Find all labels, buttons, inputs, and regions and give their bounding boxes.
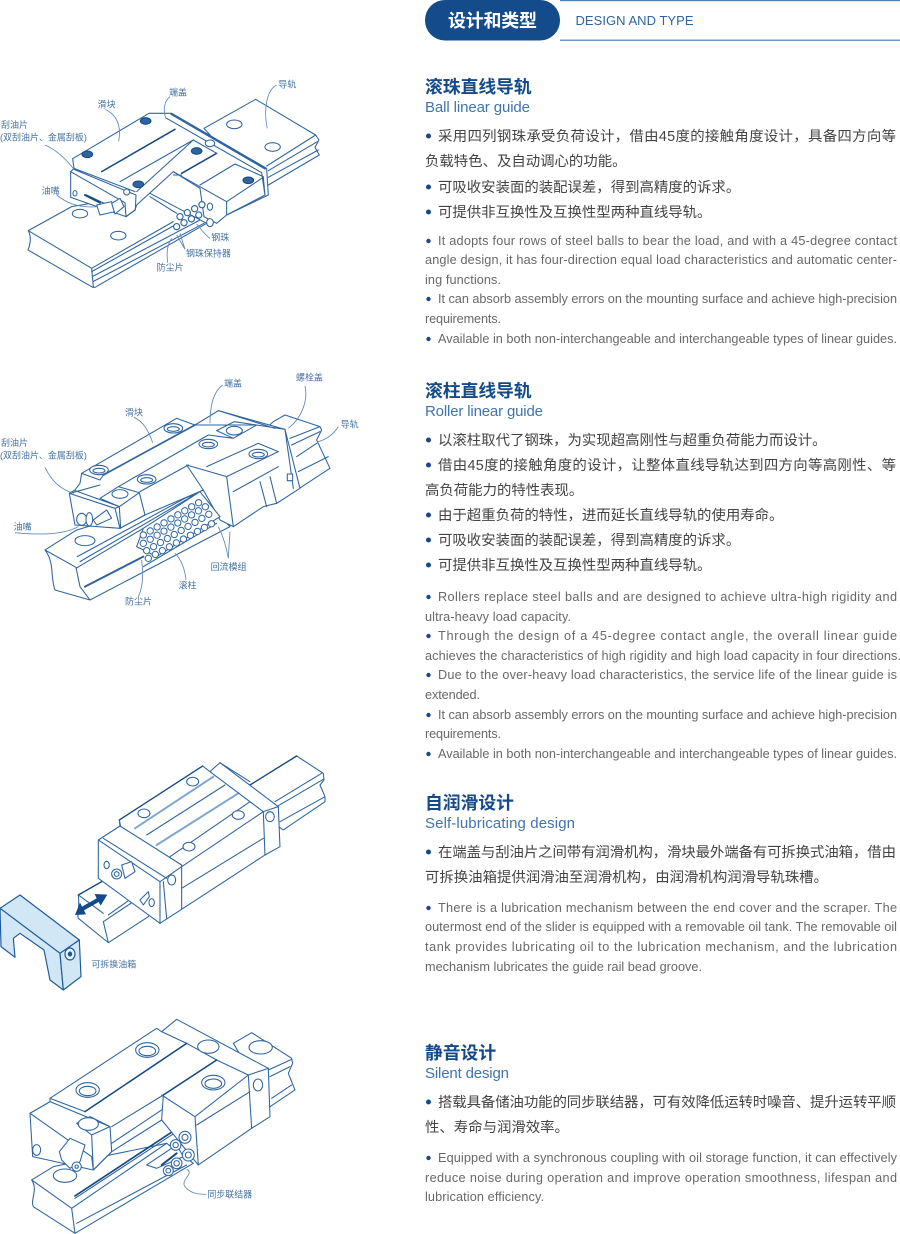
- diagram: roller linear guide: [0, 371, 359, 606]
- heading: 滚柱直线导轨: [425, 380, 532, 401]
- diagram: ball linear guide: [0, 79, 319, 287]
- heading: [425, 1042, 509, 1082]
- heading: [425, 76, 532, 116]
- part labels: 刮油片: [1, 119, 28, 130]
- chinese bullets: 可提供非互换性及互换性型两种直线导轨。: [438, 204, 711, 221]
- text: ball linear guide: [425, 76, 897, 346]
- part label: 可拆换油箱: [91, 958, 136, 969]
- part labels: 回流模组: [211, 561, 247, 572]
- header english title: DESIGN AND TYPE: [576, 13, 694, 28]
- part labels: 防尘片: [125, 595, 152, 606]
- heading: Self-lubricating design: [425, 815, 575, 832]
- icon: double arrow: [75, 894, 107, 915]
- part labels: 导轨: [278, 79, 296, 90]
- english bullets: Rollers replace steel balls and are designed to achieve ultra-high rigidity and: [438, 590, 897, 604]
- diagram: self-lubricating design: [0, 756, 325, 990]
- heading: Roller linear guide: [425, 403, 543, 420]
- english bullets: [425, 590, 900, 761]
- header pill: 设计和类型: [448, 11, 537, 31]
- section header: [425, 0, 900, 41]
- part labels: 滑块: [125, 406, 143, 417]
- english bullets: It can absorb assembly errors on the mounting surface and achieve high-precision: [438, 292, 897, 306]
- leader lines: [15, 385, 338, 597]
- english bullets: tank provides lubricating oil to the lubrication mechanism, and the lubrication: [425, 940, 897, 954]
- english bullets: Available in both non-interchangeable and interchangeable types of linear guides.: [438, 747, 897, 761]
- chinese bullets: 在端盖与刮油片之间带有润滑机构，滑块最外端备有可拆换式油箱，借由: [438, 844, 896, 861]
- english bullets: It adopts four rows of steel balls to bear the load, and with a 45-degree contact: [438, 234, 897, 248]
- text: roller linear guide: [425, 380, 900, 761]
- english bullets: outermost end of the slider is equipped with a removable oil tank. The removable oil: [425, 920, 897, 934]
- removable oil tank: [0, 895, 81, 990]
- english bullets: Due to the over-heavy load characteristics, the service life of the linear guide is: [438, 668, 897, 682]
- part labels: (双刮油片、金属刮板): [0, 131, 87, 142]
- english bullets: ultra-heavy load capacity.: [425, 610, 571, 624]
- part labels: 钢珠: [211, 231, 229, 242]
- english bullets: Through the design of a 45-degree contact angle, the overall linear guide: [438, 629, 897, 643]
- english bullets: It can absorb assembly errors on the mounting surface and achieve high-precision: [438, 708, 897, 722]
- chinese bullets: 高负荷能力的特性表现。: [425, 482, 583, 499]
- english bullets: [425, 901, 897, 974]
- english bullets: requirements.: [425, 312, 501, 326]
- part labels: 防尘片: [157, 261, 184, 272]
- chinese bullets: [425, 844, 896, 886]
- leader lines: [45, 85, 277, 263]
- part labels: [0, 79, 296, 272]
- chinese bullets: 可拆换油箱提供润滑油至润滑机构，由润滑机构润滑导轨珠槽。: [425, 869, 828, 886]
- english bullets: Equipped with a synchronous coupling with oil storage function, it can effectively: [438, 1151, 898, 1165]
- chinese bullets: 可吸收安装面的装配误差，得到高精度的诉求。: [438, 179, 740, 196]
- chinese bullets: 以滚柱取代了钢珠，为实现超高刚性与超重负荷能力而设计。: [438, 432, 827, 449]
- text: self-lubricating design: [425, 792, 897, 974]
- part labels: 端盖: [169, 86, 187, 97]
- leader line: [184, 1169, 206, 1194]
- chinese bullets: 搭载具备储油功能的同步联结器，可有效降低运转时噪音、提升运转平顺: [438, 1094, 896, 1111]
- chinese bullets: [425, 1094, 896, 1136]
- chinese bullets: [425, 127, 896, 221]
- heading: Silent design: [425, 1065, 509, 1082]
- english bullets: requirements.: [425, 727, 501, 741]
- chinese bullets: 可提供非互换性及互换性型两种直线导轨。: [438, 557, 711, 574]
- heading: [425, 792, 575, 832]
- part labels: 导轨: [341, 419, 359, 430]
- english bullets: reduce noise during operation and improve operation smoothness, lifespan and: [425, 1171, 897, 1185]
- english bullets: ing functions.: [425, 273, 501, 287]
- chinese bullets: 采用四列钢珠承受负荷设计，借由45度的接触角度设计，具备四方向等: [438, 127, 896, 145]
- part labels: 端盖: [224, 378, 242, 389]
- heading: 滚珠直线导轨: [425, 76, 532, 97]
- english bullets: There is a lubrication mechanism between the end cover and the scraper. The: [438, 901, 897, 915]
- part labels: 螺栓盖: [296, 371, 323, 382]
- part labels: 滚柱: [179, 580, 197, 591]
- text: silent design: [425, 1042, 898, 1204]
- chinese bullets: 借由45度的接触角度的设计，让整体直线导轨达到四方向等高刚性、等: [438, 456, 896, 474]
- heading: 静音设计: [425, 1042, 496, 1063]
- english bullets: lubrication efficiency.: [425, 1190, 544, 1204]
- chinese bullets: [425, 432, 896, 574]
- english bullets: [425, 1151, 898, 1204]
- part labels: 油嘴: [42, 185, 60, 196]
- header pill: [425, 0, 560, 40]
- part labels: 刮油片: [1, 437, 28, 448]
- english bullets: extended.: [425, 688, 480, 702]
- part labels: (双刮油片、金属刮板): [0, 449, 87, 460]
- chinese bullets: 性、寿命与润滑效率。: [425, 1118, 569, 1136]
- heading: 自润滑设计: [425, 792, 514, 813]
- chinese bullets: 可吸收安装面的装配误差，得到高精度的诉求。: [438, 532, 740, 549]
- english bullets: [425, 234, 897, 346]
- chinese bullets: 由于超重负荷的特性，进而延长直线导轨的使用寿命。: [438, 506, 783, 524]
- diagram: silent design: [30, 1019, 295, 1233]
- english bullets: mechanism lubricates the guide rail bead groove.: [425, 960, 702, 974]
- chinese bullets: 负载特色、及自动调心的功能。: [425, 153, 626, 170]
- part labels: 滑块: [98, 98, 116, 109]
- heading: [425, 380, 543, 420]
- heading: Ball linear guide: [425, 99, 530, 116]
- part label: 同步联结器: [207, 1188, 252, 1199]
- english bullets: achieves the characteristics of high rigidity and high load capacity in four directions.: [425, 649, 900, 663]
- english bullets: angle design, it has four-direction equal load characteristics and automatic center-: [425, 253, 897, 267]
- part labels: [0, 371, 359, 606]
- part labels: 钢珠保持器: [186, 247, 231, 258]
- part labels: 油嘴: [14, 521, 32, 532]
- english bullets: Available in both non-interchangeable and interchangeable types of linear guides.: [438, 332, 897, 346]
